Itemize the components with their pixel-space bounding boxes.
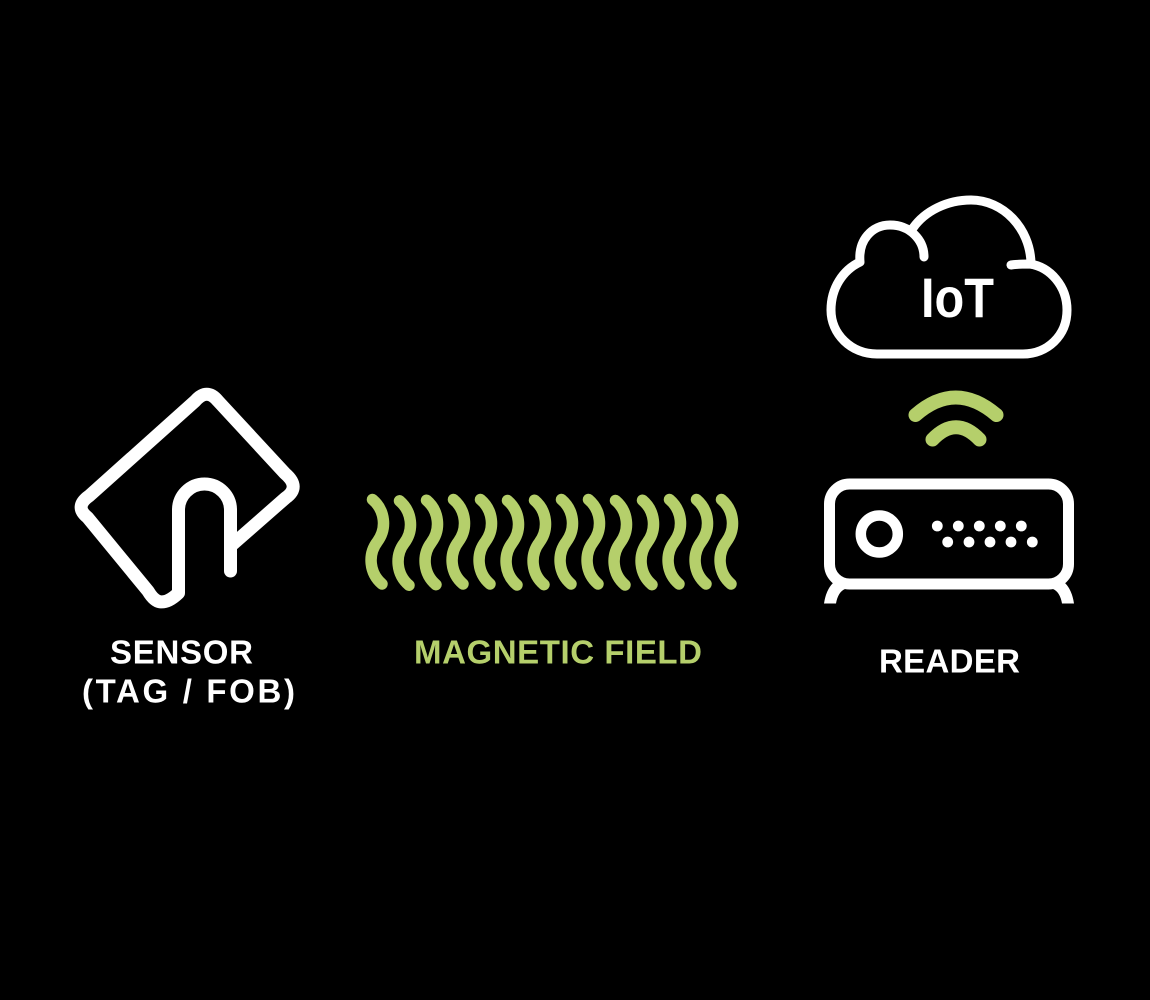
label: sensor: SENSOR	[110, 634, 253, 670]
icon: wifi signal	[916, 398, 996, 440]
label: IoT: IoT	[921, 266, 994, 329]
label: tag / fob: (TAG / FOB)	[82, 672, 295, 710]
icon: sensor tag	[81, 394, 293, 602]
label: magnetic field: MAGNETIC FIELD	[414, 634, 702, 670]
chart: magnetic field waves	[371, 500, 732, 585]
reader dial	[861, 516, 898, 552]
reader body	[830, 484, 1068, 584]
reader feet	[824, 583, 1074, 604]
icon: IoT cloud	[831, 200, 1067, 354]
icon: reader device	[824, 484, 1074, 604]
label: reader: READER	[879, 642, 1020, 680]
reader dots	[932, 521, 1038, 547]
